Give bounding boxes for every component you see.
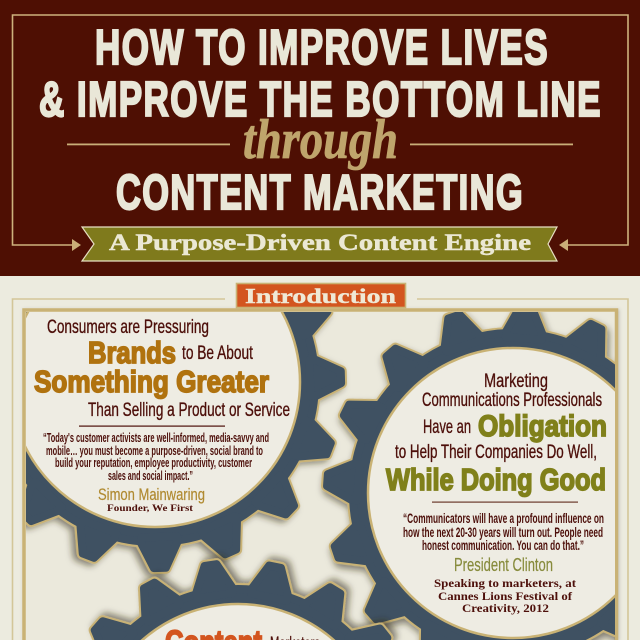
gear: bottom — [88, 552, 402, 640]
text block: communications professionals: President Clinton — [454, 555, 553, 575]
title: through: through — [243, 109, 398, 171]
gear: right — [318, 312, 615, 640]
text block: consumers: Than Selling a Product or Service — [88, 399, 290, 421]
panel: introduction section — [12, 282, 629, 640]
text block: consumers: Something Greater — [34, 364, 269, 399]
text block: consumers: build your reputation, employee productivity, customer — [55, 455, 252, 470]
text block: consumers: Simon Mainwaring — [98, 485, 205, 504]
text block: communications professionals: Creativity, 2012 — [462, 603, 549, 615]
text block: communications professionals: Obligation — [478, 410, 607, 443]
gears — [26, 312, 615, 640]
banner: subtitle: A Purpose-Driven Content Engine — [109, 230, 531, 255]
text block: content marketers — [165, 629, 319, 640]
text block: consumers: to Be About — [182, 342, 253, 364]
arrow: left pointing to banner — [72, 239, 81, 251]
text block: consumers: sales and social impact.” — [108, 468, 193, 483]
gear: upper left — [26, 312, 348, 580]
text block: communications professionals: Marketing — [484, 370, 548, 392]
text block: consumers: mobile… you must become a purpose-driven, social brand to — [46, 443, 263, 458]
text block: communications professionals: Speaking to marketers, at — [434, 578, 576, 590]
banner: subtitle — [82, 227, 557, 261]
panel: title header — [0, 0, 640, 276]
divider: right of through — [410, 144, 573, 145]
text block: communications professionals — [386, 370, 607, 615]
arrow: right pointing to banner — [559, 239, 568, 251]
text block: consumers: “Today's customer activists are well-informed, media-savvy and — [43, 430, 269, 445]
text block: consumers: Founder, We First — [107, 503, 193, 513]
divider: left of through — [67, 144, 230, 145]
label: introduction — [236, 284, 406, 308]
text block: communications professionals: Have an — [423, 416, 471, 438]
label: introduction: Introduction — [245, 284, 396, 308]
text block: communications professionals: Cannes Lions Festival of — [438, 591, 572, 603]
text block: consumers: Brands — [88, 335, 176, 370]
text block: consumers: Consumers are Pressuring — [47, 316, 209, 338]
text block: consumers — [34, 316, 290, 513]
